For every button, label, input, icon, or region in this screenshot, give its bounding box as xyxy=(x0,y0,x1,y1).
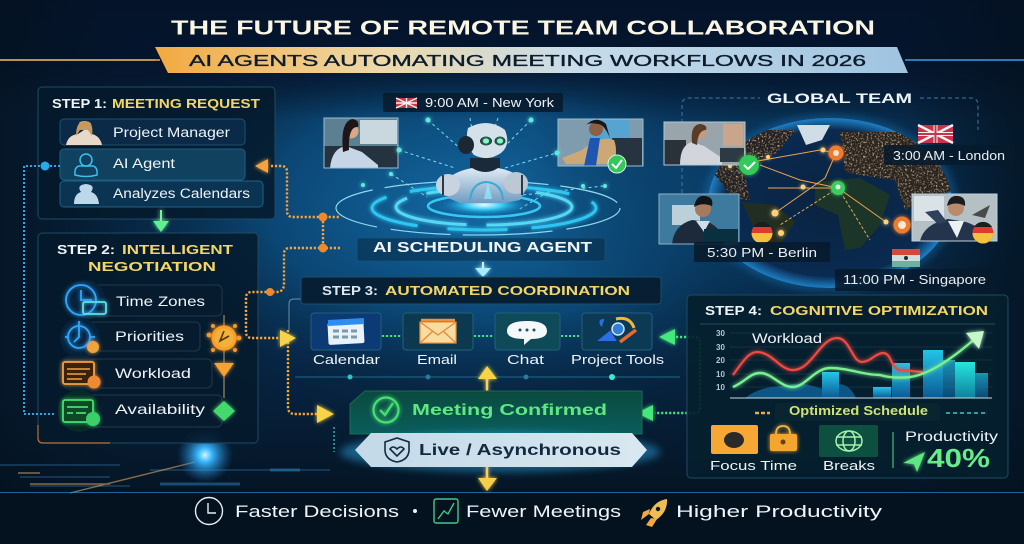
step 2 heading xyxy=(57,242,233,274)
flag: germany circles xyxy=(752,222,994,244)
row: ai agent: AI Agent xyxy=(113,156,175,171)
time pill: berlin: 5:30 PM - Berlin xyxy=(707,245,817,260)
time pill: singapore: 11:00 PM - Singapore xyxy=(843,272,986,287)
focus time: Focus Time xyxy=(710,458,797,473)
workload chart xyxy=(716,329,992,398)
workload chart: 20 xyxy=(716,356,725,365)
global team heading: GLOBAL TEAM xyxy=(767,90,912,106)
time pill: london: 3:00 AM - London xyxy=(893,148,1005,163)
label: ai scheduling agent xyxy=(357,238,605,261)
flag: singapore xyxy=(892,249,920,267)
row: time zones: Time Zones xyxy=(116,293,205,309)
subtitle banner xyxy=(0,47,1024,73)
footer benefits: Faster Decisions xyxy=(235,502,399,521)
step 3 heading: AUTOMATED COORDINATION xyxy=(385,283,630,298)
step 1 heading xyxy=(52,96,260,111)
connector: blue dotted feedback loop xyxy=(24,162,60,414)
tool: chat: Chat xyxy=(507,353,545,367)
arrow: step 4 to project tools xyxy=(637,329,700,421)
step 4 heading xyxy=(705,303,988,318)
globe map xyxy=(703,114,957,292)
tool: calendar xyxy=(311,313,381,367)
icon: shield xyxy=(385,438,409,462)
hologram rings xyxy=(336,181,620,235)
tool: project tools: Project Tools xyxy=(571,353,664,367)
icon: rocket xyxy=(641,499,667,527)
icon: green check xyxy=(739,155,759,175)
panel: live or asynchronous xyxy=(340,432,660,472)
icon: clock xyxy=(196,498,222,524)
step 1 heading: MEETING REQUEST xyxy=(112,96,260,111)
footer benefits: Fewer Meetings xyxy=(466,502,621,521)
time pill: berlin xyxy=(694,242,830,262)
tool: project tools xyxy=(571,313,664,367)
network spokes xyxy=(391,118,603,210)
panel: step 1 meeting request xyxy=(38,87,275,219)
panel: global team xyxy=(659,90,1014,292)
row: availability: Availability xyxy=(115,401,205,417)
time pill: new york: 9:00 AM - New York xyxy=(425,95,555,110)
step 4 heading: STEP 4: xyxy=(705,303,762,318)
photo: team member left xyxy=(659,194,739,244)
icon: chart square xyxy=(434,499,458,523)
tool: email xyxy=(403,313,473,367)
photo: team member top left xyxy=(664,122,745,165)
tool: chat xyxy=(495,313,560,367)
row: project manager xyxy=(60,119,245,145)
panel: step 2 intelligent negotiation xyxy=(38,233,258,443)
row: priorities: Priorities xyxy=(115,328,184,344)
workload chart: Workload xyxy=(752,331,822,346)
step 1 heading: STEP 1: xyxy=(52,96,107,111)
row: workload: Workload xyxy=(115,365,191,381)
pins xyxy=(828,146,910,234)
arrow: confirmed up to coordination xyxy=(478,366,497,391)
productivity stat: Productivity xyxy=(905,429,998,444)
breaks xyxy=(819,425,878,473)
panel: step 3 automated coordination xyxy=(289,277,700,421)
photo: colleague left xyxy=(324,118,398,168)
panel: meeting confirmed xyxy=(350,391,642,434)
connector: orange dotted paths xyxy=(246,159,340,423)
icon: robot xyxy=(436,123,528,203)
icon: padlock xyxy=(770,426,797,451)
row: time zones xyxy=(65,280,222,320)
row: availability xyxy=(58,390,222,432)
workload chart: 30 xyxy=(716,329,725,338)
tool: email: Email xyxy=(417,353,457,367)
row: analyzes calendars xyxy=(60,181,263,207)
panel: ai scheduling agent hub xyxy=(324,93,643,277)
photo: team member right xyxy=(912,194,997,241)
step 2 heading: NEGOTIATION xyxy=(88,259,216,274)
step 3 heading: STEP 3: xyxy=(322,283,378,298)
step 2 heading: STEP 2: xyxy=(57,242,115,257)
step 3 heading xyxy=(301,277,661,304)
panel: step 4 cognitive optimization xyxy=(687,295,1008,478)
row: workload xyxy=(58,353,212,393)
focus time xyxy=(710,425,797,473)
subtitle banner: AI AGENTS AUTOMATING MEETING WORKFLOWS IN 2026 xyxy=(189,53,866,70)
label: ai scheduling agent: AI SCHEDULING AGENT xyxy=(373,240,592,256)
title: THE FUTURE OF REMOTE TEAM COLLABORATION xyxy=(171,18,875,40)
row: project manager: Project Manager xyxy=(113,125,231,140)
tool: calendar: Calendar xyxy=(313,353,380,367)
arrow: down to outcomes xyxy=(478,467,497,491)
panel: meeting confirmed: Meeting Confirmed xyxy=(412,402,607,419)
row: analyzes calendars: Analyzes Calendars xyxy=(113,186,250,201)
optimized schedule label: Optimized Schedule xyxy=(789,404,928,418)
workload chart: 30 xyxy=(716,343,725,352)
row: priorities xyxy=(60,318,200,358)
time pill: singapore xyxy=(835,269,994,291)
workload chart: 10 xyxy=(716,383,725,392)
panel: live or asynchronous: Live / Asynchronous xyxy=(419,442,621,459)
time pill: new york xyxy=(383,93,563,112)
arrow: step 1 to step 2 xyxy=(153,210,169,232)
row: ai agent xyxy=(60,149,245,180)
footer benefits: Higher Productivity xyxy=(676,502,883,521)
arrow: agent to step 3 xyxy=(475,262,491,277)
productivity stat xyxy=(903,429,998,473)
tool links xyxy=(382,335,581,337)
icon: check circle xyxy=(374,398,398,422)
icon: priority gear and status markers xyxy=(207,315,241,421)
breaks: Breaks xyxy=(823,458,876,473)
footer benefits xyxy=(196,498,883,527)
workload chart: 10 xyxy=(716,370,725,379)
productivity stat: 40% xyxy=(927,443,990,473)
step 4 heading: COGNITIVE OPTIMIZATION xyxy=(770,303,988,318)
optimized schedule label xyxy=(755,403,985,421)
time pill: london xyxy=(884,145,1014,165)
step 2 heading: INTELLIGENT xyxy=(122,242,233,257)
flag: united kingdom xyxy=(918,125,953,143)
photo: colleague right with check xyxy=(558,119,643,173)
